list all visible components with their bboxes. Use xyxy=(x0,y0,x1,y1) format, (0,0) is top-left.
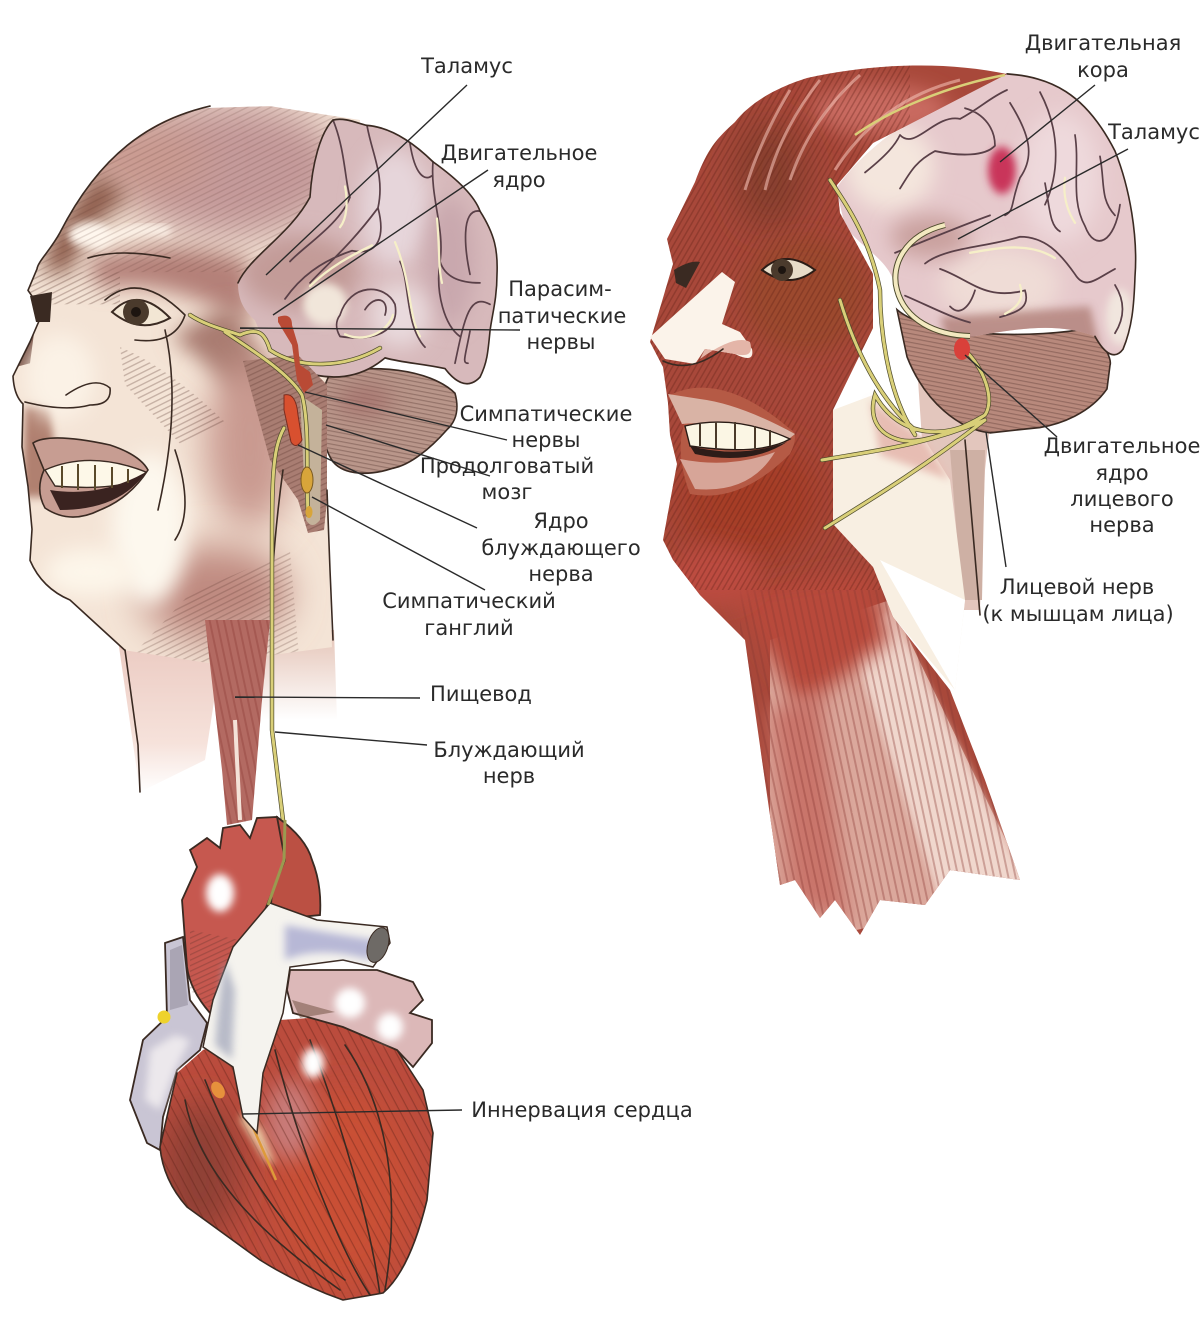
label: Иннервация сердца: Иннервация сердца xyxy=(471,1098,693,1122)
left nerves: parasympathetic and sympathetic xyxy=(190,315,380,820)
label: Двигательная кора xyxy=(1000,31,1181,162)
label: Двигательное ядро лицевого нерва: Двигательное xyxy=(1044,434,1200,458)
label: Двигательное ядро лицевого нерва xyxy=(965,355,1200,537)
label: Блуждающий нерв: Блуждающий xyxy=(433,738,585,762)
right face: facial nerve branches xyxy=(822,75,1005,528)
label: Симпатические нервы: нервы xyxy=(512,428,580,452)
label: Симпатический ганглий: Симпатический xyxy=(382,589,556,613)
label: Ядро блуждающего нерва: Ядро xyxy=(533,509,589,533)
label: Ядро блуждающего нерва: нерва xyxy=(528,562,594,586)
left head: outline xyxy=(13,106,210,650)
label: Лицевой нерв (к мышцам лица) xyxy=(982,432,1174,626)
nose xyxy=(650,272,752,365)
label: Лицевой нерв (к мышцам лица): Лицевой нерв xyxy=(1000,575,1154,599)
label: Двигательное ядро лицевого нерва: нерва xyxy=(1089,513,1155,537)
icon: right mouth with teeth xyxy=(668,388,795,496)
label: Ядро блуждающего нерва: блуждающего xyxy=(481,536,641,560)
illustration: right head with facial muscles xyxy=(235,31,1200,1122)
label: Таламус (left) xyxy=(266,54,513,275)
left head: skin xyxy=(10,101,360,669)
icon: nose and mouth with teeth xyxy=(25,330,185,540)
label: Двигательное ядро (left): Двигательное xyxy=(441,141,597,165)
right brain: cerebellum xyxy=(897,310,1110,433)
label: Двигательное ядро (left) xyxy=(273,141,597,315)
illustration: heart xyxy=(130,817,450,1310)
left neck: pale front skin xyxy=(118,630,225,792)
label: Продолговатый мозг xyxy=(326,425,594,504)
label: Иннервация сердца xyxy=(242,1098,693,1122)
right head: pale cheek skin xyxy=(833,395,965,690)
heart: rear aorta and left atrium edge xyxy=(270,817,320,920)
nucleus: motor nucleus and medulla spots xyxy=(278,316,313,518)
right brain: cerebrum xyxy=(836,74,1136,355)
label: Блуждающий нерв: нерв xyxy=(483,764,535,788)
label: Продолговатый мозг: мозг xyxy=(482,480,532,504)
label: Лицевой нерв (к мышцам лица): (к мышцам лица) xyxy=(982,602,1174,626)
label: Пищевод: Пищевод xyxy=(430,682,532,706)
label: Таламус (right): Таламус xyxy=(1107,120,1200,144)
right face: muscle mass xyxy=(650,60,1040,960)
label: Симпатические нервы xyxy=(305,392,632,452)
label: Двигательное ядро лицевого нерва: лицевого xyxy=(1070,487,1174,511)
heart: ventricle muscle xyxy=(159,1018,434,1301)
left brain: cerebrum xyxy=(238,119,497,384)
icon: right eye xyxy=(674,259,815,288)
icon: left eye xyxy=(30,253,185,341)
label: Двигательное ядро лицевого нерва: ядро xyxy=(1095,461,1149,485)
left brain: cerebellum xyxy=(321,369,457,473)
label: Парасимпатические нервы: Парасим- xyxy=(508,277,612,301)
label: Парасимпатические нервы: нервы xyxy=(527,330,595,354)
left neck: brainstem and medulla xyxy=(243,355,333,640)
label: Парасимпатические нервы xyxy=(240,277,626,354)
right head: neck brainstem xyxy=(917,365,990,615)
label: Таламус (right) xyxy=(958,120,1200,239)
label: Двигательная кора: Двигательная xyxy=(1025,31,1181,55)
label: Парасимпатические нервы: патические xyxy=(498,304,626,328)
label: Продолговатый мозг: Продолговатый xyxy=(420,454,594,478)
left neck: front edge line xyxy=(125,650,140,792)
motor cortex xyxy=(988,147,1016,194)
nucleus: facial motor nucleus xyxy=(954,338,970,360)
label: Симпатический ганглий: ганглий xyxy=(424,616,514,640)
left neck: pale rear skin xyxy=(262,630,337,720)
label: Ядро блуждающего нерва xyxy=(298,445,641,586)
label: Симпатические нервы: Симпатические xyxy=(460,402,632,426)
label: Таламус (left): Таламус xyxy=(420,54,513,78)
illustration: left head with brain and vagus nerve xyxy=(10,101,497,825)
label: Двигательное ядро (left): ядро xyxy=(492,168,546,192)
heart: left atrium and pulmonary veins xyxy=(287,970,432,1067)
heart: vagus nerve branch xyxy=(268,820,285,905)
heart: pulmonary trunk xyxy=(203,903,393,1133)
label: Блуждающий нерв xyxy=(275,732,585,788)
label: Симпатический ганглий xyxy=(312,497,556,640)
label: Двигательная кора: кора xyxy=(1077,58,1129,82)
heart: aorta xyxy=(182,817,285,1013)
esophagus xyxy=(205,620,270,825)
heart: right atrium xyxy=(130,937,207,1150)
